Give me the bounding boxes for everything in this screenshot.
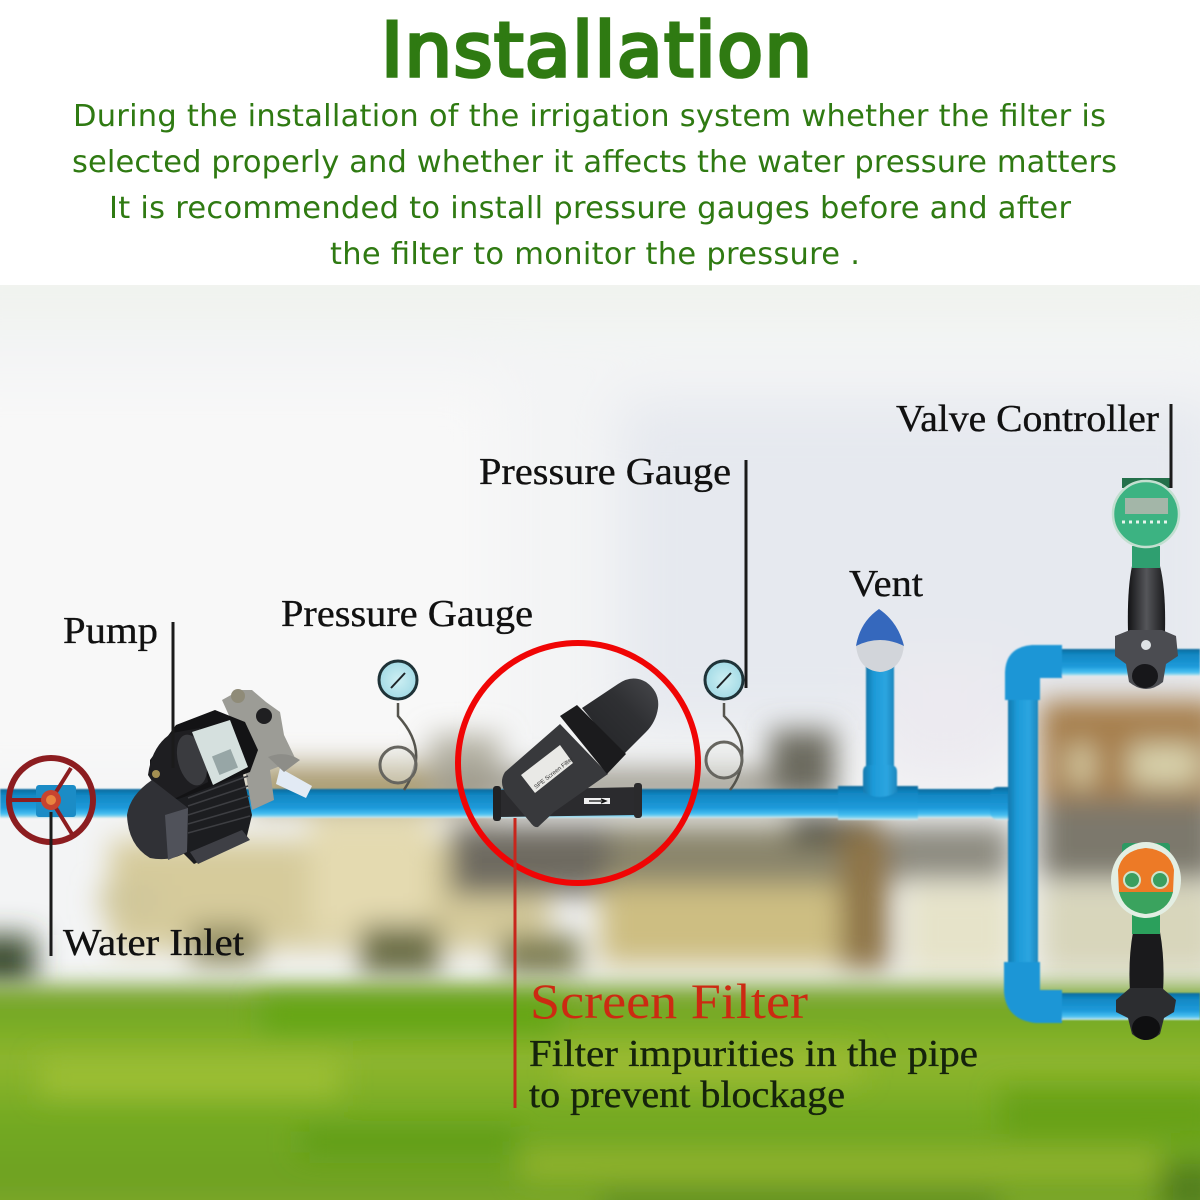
label: vent: Vent — [849, 563, 923, 605]
label: valve controller: Valve Controller — [896, 398, 1159, 440]
blue pipe network — [0, 645, 1200, 1023]
leader lines — [51, 404, 1171, 1108]
upper controller — [1113, 478, 1179, 689]
lower elbow — [1004, 962, 1062, 1023]
lower controller ears — [1122, 843, 1170, 855]
intro text — [72, 99, 1117, 272]
vent grey base — [856, 630, 904, 672]
label: water inlet: Water Inlet — [63, 922, 244, 964]
vertical pipe — [1008, 672, 1038, 972]
upper controller stem — [1128, 566, 1165, 632]
pump label — [192, 720, 248, 785]
intro text: During the installation of the irrigation system whether the filter is — [73, 99, 1106, 134]
lower branch pipe — [1050, 993, 1200, 1020]
upper valve body — [1115, 630, 1178, 689]
intro text: the filter to monitor the pressure . — [330, 237, 860, 272]
filter left flange — [493, 786, 501, 821]
filter collar — [560, 705, 626, 774]
lower controller stem — [1129, 932, 1164, 992]
callout: screen filter: Filter impurities in the pipe — [529, 1033, 978, 1075]
upper controller dial — [1113, 481, 1179, 547]
filter inline body — [497, 787, 640, 817]
red highlight circle — [458, 643, 698, 883]
callout: screen filter — [529, 973, 978, 1116]
header background — [0, 0, 1200, 285]
water inlet valve — [9, 758, 93, 842]
upper branch pipe — [1050, 649, 1200, 676]
label: first pressure gauge: Pressure Gauge — [281, 593, 533, 635]
callout: screen filter: to prevent blockage — [529, 1074, 845, 1116]
label: pump: Pump — [63, 610, 158, 652]
filter bowl — [502, 724, 608, 827]
pump — [127, 689, 312, 864]
screen filter product: SPE Screen Filter — [534, 756, 575, 791]
pump head — [222, 690, 296, 810]
pump motor cap — [148, 728, 208, 798]
upper elbow — [1005, 645, 1062, 700]
label: second pressure gauge: Pressure Gauge — [479, 451, 731, 493]
right pressure gauge — [705, 661, 743, 790]
main pipe — [0, 789, 1010, 818]
intro text: selected properly and whether it affects the water pressure matters — [72, 145, 1117, 180]
vent riser — [866, 660, 894, 770]
callout: screen filter: Screen Filter — [530, 973, 808, 1029]
pump cooling body — [176, 770, 252, 864]
pump end cap — [127, 780, 188, 859]
filter right flange — [634, 783, 642, 818]
filter label — [521, 745, 573, 793]
left pressure gauge — [379, 661, 417, 790]
vent blue cap — [856, 609, 904, 646]
title: Installation — [381, 6, 812, 94]
filter arrow tag — [584, 798, 610, 804]
pump foot — [190, 830, 250, 864]
pump motor top — [150, 710, 258, 800]
vent valve — [856, 609, 904, 672]
upper controller tab — [1122, 478, 1172, 488]
lower valve body — [1116, 988, 1176, 1040]
filter cap — [582, 678, 658, 756]
blurred landscape background — [0, 250, 1200, 1200]
vent tee — [863, 765, 897, 797]
pump outlet — [276, 768, 312, 798]
intro text: It is recommended to install pressure gauges before and after — [109, 191, 1071, 226]
lower controller — [1111, 842, 1181, 1040]
screen filter product — [493, 678, 658, 827]
main pipe joint — [838, 786, 918, 820]
lower controller dial — [1111, 842, 1181, 918]
